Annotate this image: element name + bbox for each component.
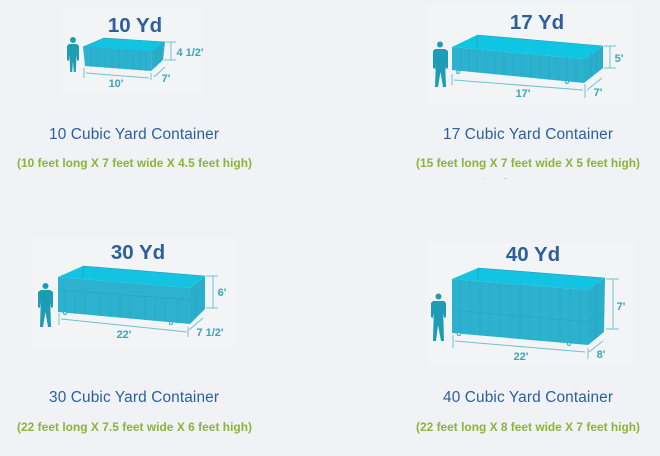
caption: 17 cubic yard container: 17 Cubic Yard Container xyxy=(443,126,613,143)
heading: 40 Yd: 40 Yd xyxy=(506,243,560,266)
dimension: length 22 ft: 22' xyxy=(514,351,529,363)
dimension: height 5 ft: 5' xyxy=(615,53,624,65)
caption: 30 cubic yard container: 30 Cubic Yard Container xyxy=(49,389,219,406)
heading: 17 Yd: 17 Yd xyxy=(510,11,564,34)
dimension: length 10 ft xyxy=(84,68,151,90)
dimension: width 7 ft xyxy=(154,67,171,85)
dimension: width 7 ft: 7' xyxy=(162,73,171,85)
dimension: length 22 ft: 22' xyxy=(117,329,132,341)
panel: 40 yard container xyxy=(416,243,640,434)
dimension: height 6 ft: 6' xyxy=(218,287,227,299)
dimension: height 4 1/2 ft: 4 1/2' xyxy=(176,47,204,59)
dimension: width 7 1/2 ft: 7 1/2' xyxy=(196,327,224,339)
dimension: length 10 ft: 10' xyxy=(109,78,124,90)
icon: person silhouette xyxy=(431,294,446,341)
panel: 10 yard container xyxy=(17,8,252,170)
icon: person silhouette xyxy=(67,37,79,72)
caption: 10 cubic yard container: 10 Cubic Yard Container xyxy=(49,126,219,143)
illustration: 30 yard dumpster xyxy=(58,266,205,324)
dimensions note: (22 feet long X 8 feet wide X 7 feet high) xyxy=(416,420,640,434)
dimension: width 7 1/2 ft xyxy=(189,318,224,339)
heading: 30 Yd: 30 Yd xyxy=(111,241,165,264)
dimension: height 5 ft xyxy=(604,46,624,68)
dimension: length 22 ft xyxy=(453,335,588,363)
dimension: width 7 ft xyxy=(587,78,603,99)
dimension: length 17 ft xyxy=(452,74,585,100)
dimension: height 7 ft xyxy=(606,279,626,329)
dimension: height 4 1/2 ft xyxy=(164,42,204,60)
dimensions note: (15 feet long X 7 feet wide X 5 feet high) xyxy=(416,156,640,170)
dimension: length 22 ft xyxy=(59,313,188,341)
illustration: 40 yard dumpster xyxy=(452,268,605,346)
illustration: 17 yard dumpster xyxy=(452,35,603,84)
dimensions note: (10 feet long X 7 feet wide X 4.5 feet high) xyxy=(17,156,252,170)
icon: person silhouette xyxy=(433,42,448,87)
dimension: width 8 ft: 8' xyxy=(597,349,606,361)
panel: 17 yard container xyxy=(416,5,640,179)
panel: 30 yard container xyxy=(17,238,252,434)
icon: person silhouette xyxy=(38,283,53,327)
dimension: length 17 ft: 17' xyxy=(516,88,531,100)
caption: 40 cubic yard container: 40 Cubic Yard Container xyxy=(443,389,613,406)
illustration: 10 yard dumpster xyxy=(83,38,165,71)
dimension: width 8 ft xyxy=(589,341,606,361)
dimension: height 7 ft: 7' xyxy=(617,301,626,313)
dimensions note: (22 feet long X 7.5 feet wide X 6 feet high) xyxy=(17,420,252,434)
heading: 10 Yd: 10 Yd xyxy=(108,14,162,37)
dimension: width 7 ft: 7' xyxy=(594,87,603,99)
dimension: height 6 ft xyxy=(206,276,227,308)
